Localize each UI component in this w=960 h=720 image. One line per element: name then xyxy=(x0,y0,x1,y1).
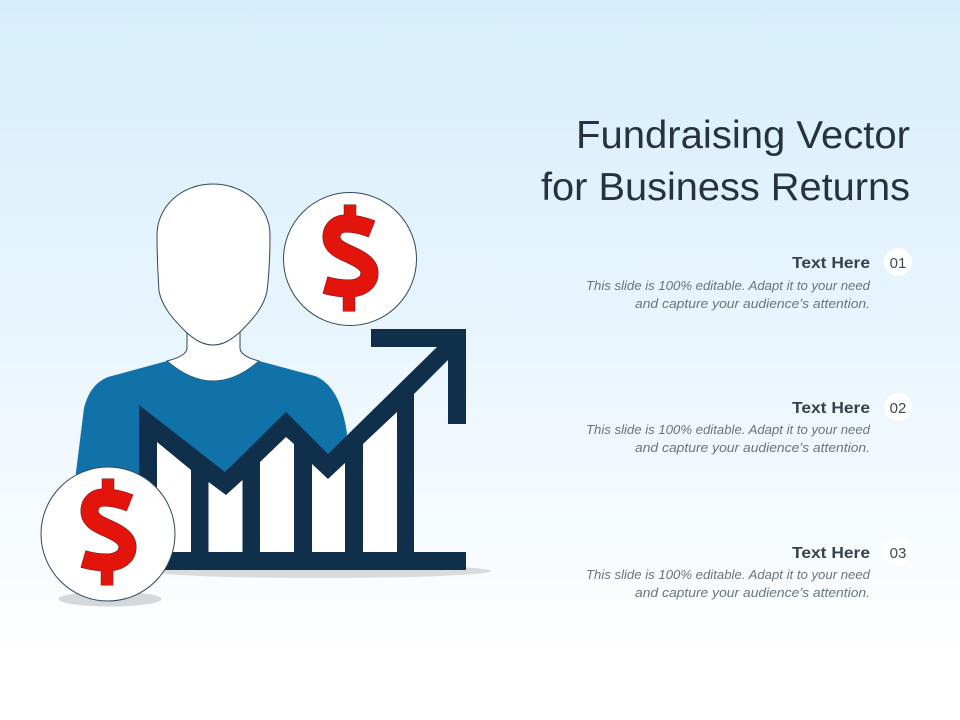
bar 3 xyxy=(260,437,294,552)
description 01 xyxy=(586,279,871,311)
dollar coin: bottom xyxy=(41,467,175,601)
description 02: and capture your audience’s attention. xyxy=(635,441,870,455)
description 01: and capture your audience’s attention. xyxy=(635,297,870,311)
bar 2 xyxy=(208,480,242,552)
description 03: This slide is 100% editable. Adapt it to your need xyxy=(586,568,871,582)
title xyxy=(541,114,910,209)
number badge 01: 01 xyxy=(890,255,906,272)
chart frame and arrow xyxy=(139,329,466,570)
description 03: and capture your audience’s attention. xyxy=(635,586,870,600)
number badge 02 xyxy=(884,393,912,421)
description 02 xyxy=(586,423,871,455)
icon: dollar sign xyxy=(325,204,372,312)
description 02: This slide is 100% editable. Adapt it to your need xyxy=(586,423,871,437)
heading 01: Text Here xyxy=(792,255,870,272)
list item 02 xyxy=(586,393,912,455)
title: Fundraising Vector xyxy=(576,114,910,157)
neck xyxy=(167,325,259,381)
heading 02: Text Here xyxy=(792,400,870,417)
head xyxy=(157,184,270,345)
ground shadow: coin xyxy=(58,592,162,606)
bar 5 xyxy=(363,412,397,552)
number badge 03 xyxy=(884,538,912,566)
list item 01 xyxy=(586,248,912,311)
shirt xyxy=(74,361,347,500)
illustration: person with chart and dollar coins xyxy=(41,184,491,606)
number badge 01 xyxy=(884,248,912,276)
ground shadow: chart xyxy=(149,564,491,578)
description 03 xyxy=(586,568,871,600)
heading 03: Text Here xyxy=(792,545,870,562)
number badge 03: 03 xyxy=(890,545,906,562)
dollar coin: top xyxy=(284,192,416,326)
description 01: This slide is 100% editable. Adapt it to your need xyxy=(586,279,871,293)
bar 1 xyxy=(157,442,191,552)
title: for Business Returns xyxy=(541,166,910,209)
list item 03 xyxy=(586,538,912,600)
person figure xyxy=(74,184,347,500)
number badge 02: 02 xyxy=(890,400,906,417)
bar 4 xyxy=(312,463,345,552)
growth chart with arrow xyxy=(139,329,466,570)
icon: dollar sign xyxy=(83,478,130,586)
